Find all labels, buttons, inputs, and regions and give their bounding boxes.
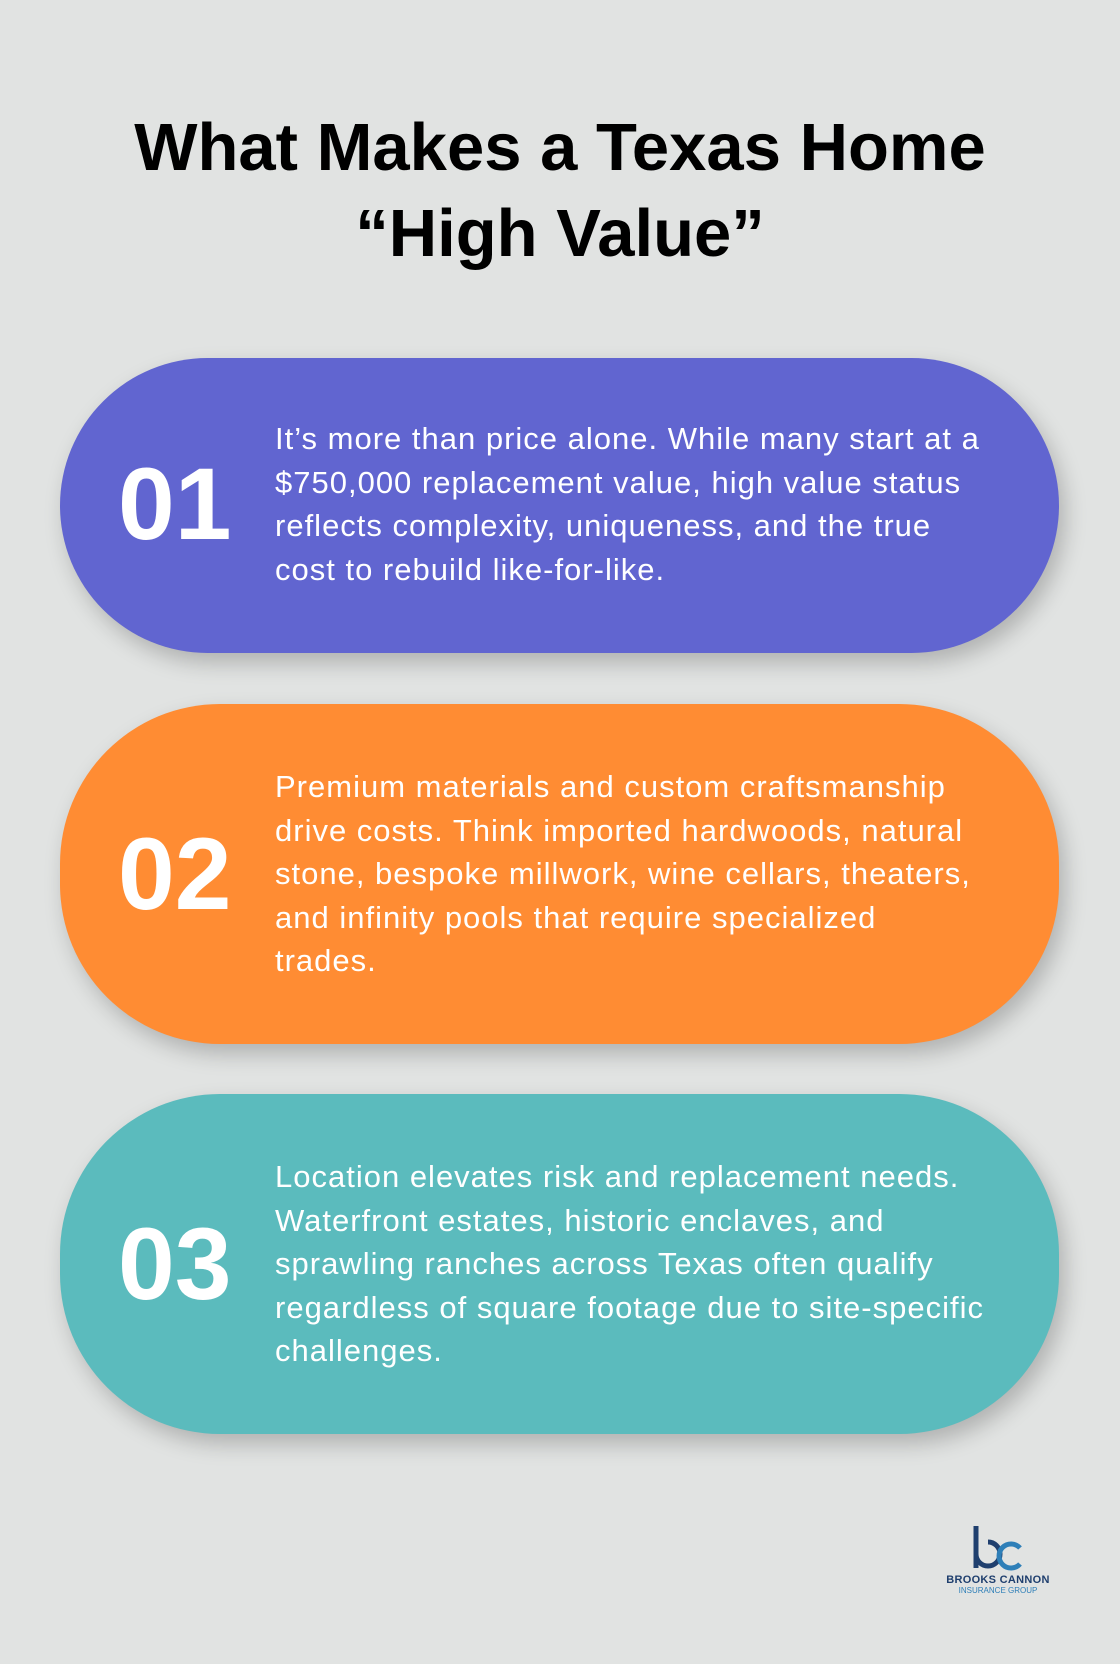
text 03: sprawling ranches across Texas often qualify	[275, 1246, 934, 1281]
text 02: drive costs. Think imported hardwoods, natural	[275, 812, 963, 848]
number 03: 03	[118, 1207, 231, 1321]
text 01: $750,000 replacement value, high value status	[275, 464, 961, 500]
text 03	[275, 1159, 984, 1368]
title: “High Value”	[355, 196, 765, 271]
text 03: Waterfront estates, historic enclaves, and	[275, 1202, 884, 1238]
number 01: 01	[118, 447, 231, 561]
title	[134, 110, 986, 271]
icon: bc mark	[974, 1526, 1022, 1570]
text 02: trades.	[275, 943, 377, 978]
text 02: stone, bespoke millwork, wine cellars, theaters,	[275, 856, 971, 891]
panel: 02	[60, 704, 1059, 1044]
panel: 03	[60, 1094, 1059, 1434]
number 02: 02	[118, 817, 231, 931]
text 02: and infinity pools that require specialized	[275, 900, 876, 934]
text 02	[275, 769, 971, 978]
text 01: It’s more than price alone. While many start at a	[275, 421, 980, 456]
text 03: Location elevates risk and replacement needs.	[275, 1159, 959, 1194]
logo: INSURANCE GROUP	[959, 1586, 1037, 1595]
title: What Makes a Texas Home	[134, 110, 986, 185]
text 02: Premium materials and custom craftsmanship	[275, 769, 946, 804]
logo	[946, 1526, 1050, 1595]
logo: BROOKS CANNON	[946, 1574, 1050, 1586]
text 01	[275, 421, 980, 586]
panel: 01	[60, 358, 1059, 653]
text 03: regardless of square footage due to site-specific	[275, 1290, 984, 1324]
text 01: reflects complexity, uniqueness, and the true	[275, 508, 931, 543]
text 03: challenges.	[275, 1333, 443, 1368]
text 01: cost to rebuild like-for-like.	[275, 552, 665, 586]
